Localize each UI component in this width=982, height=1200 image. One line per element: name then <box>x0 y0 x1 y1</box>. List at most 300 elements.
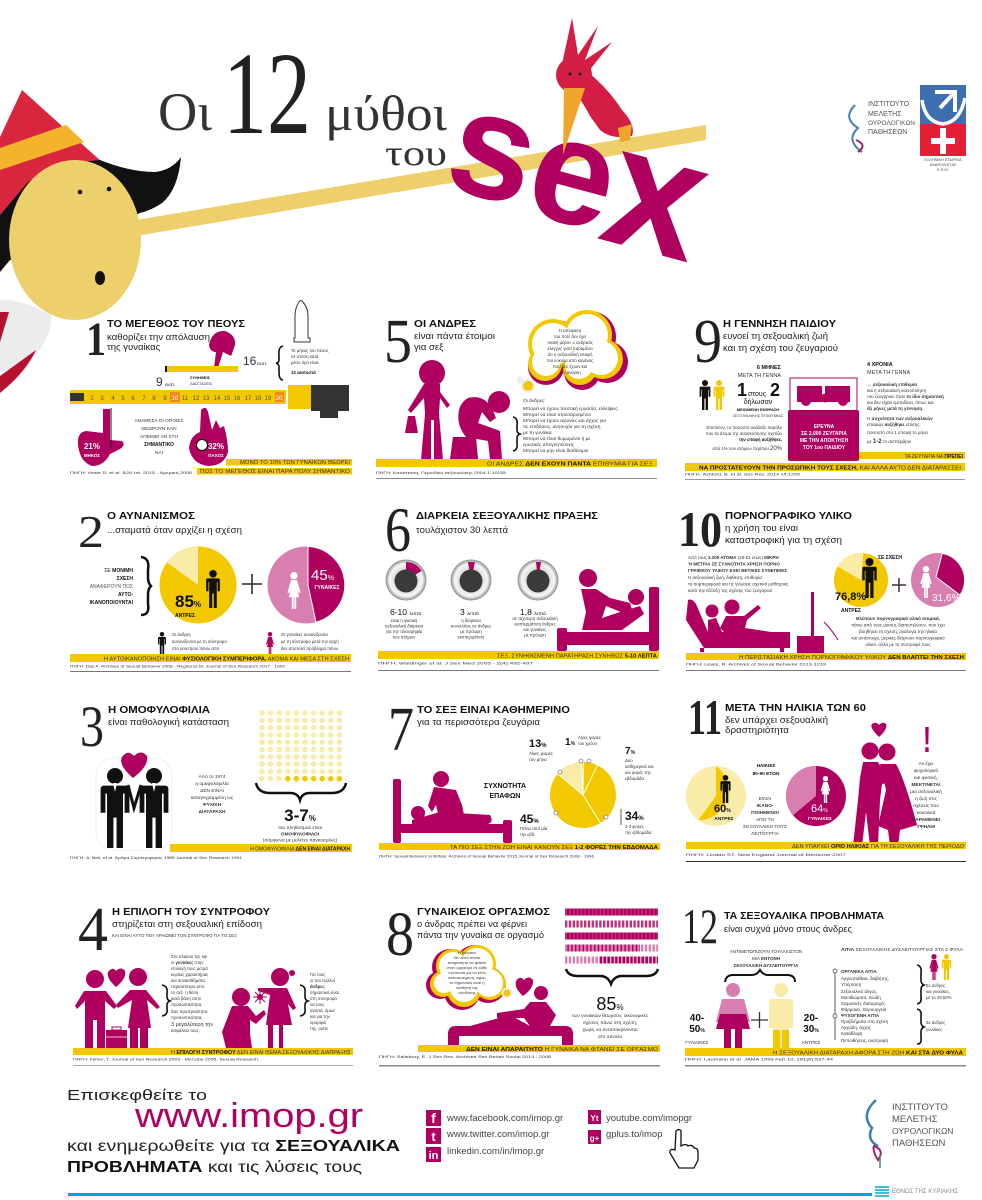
text: fact: ΨΥΧΙΚΗ <box>203 802 222 808</box>
causes list: Αγχώδη, άγχος <box>841 1024 872 1030</box>
left column: 6 months: 1 <box>737 380 747 400</box>
plus sign <box>242 574 262 594</box>
footer call to action: www.imop.gr <box>134 1097 363 1135</box>
text: stat caption: του πληθυσμού είναι <box>278 824 322 831</box>
conclusion bar <box>418 1045 660 1053</box>
number 6: 6 <box>385 494 411 565</box>
pie chart: women 64%: 64% <box>811 803 828 815</box>
label: 34%: 2-3 φορές <box>625 824 644 829</box>
footer call to action: ΠΡΟΒΛΗΜΑΤΑ και τις λύσεις τους <box>67 1159 362 1176</box>
source: ΠΗΓΗ: Salisbury, E. J Sex Res. Archives Sex Behav Social 2014 - 2008 <box>379 1055 551 1059</box>
text list: Μπορεί να έχουν πιεστική εργασία, ελλείψεις <box>523 405 618 412</box>
icon: kneeling man offering flower to woman <box>222 968 296 1048</box>
conclusion bar <box>376 459 657 468</box>
logo: institute of urological diseases: ΜΕΛΕΤΗΣ <box>868 111 902 118</box>
tape measure: 14 <box>214 396 221 402</box>
subheading: ο άνδρας πρέπει να φέρνει <box>417 919 527 930</box>
causes list: Φάρμακα, Χειρουργεία <box>841 1006 887 1012</box>
heading: Η ΓΕΝΝΗΣΗ ΠΑΙΔΙΟΥ <box>723 318 836 330</box>
stat: women: 40- <box>690 1013 704 1024</box>
text: left: οι γυναίκες στην <box>171 960 203 965</box>
title: Οι 12 μύθοι του: του <box>385 133 447 173</box>
left column: 6 months: από 1% των ατόμων περίπου 20% <box>712 446 783 452</box>
right column: 4 years: έξι μήνες μετά τη γέννηση. <box>867 406 923 412</box>
subheading: είναι συχνά μόνο στους άνδρες <box>724 924 852 935</box>
icon: couple on sofa <box>686 600 790 652</box>
source: ΠΗΓΗ: Κατάσταση, Περιοδικό σεξουαλικής 2004-1-10155 <box>376 471 506 475</box>
text: left: προσωπικότητα. <box>171 1002 202 1007</box>
causes list: Προβλήματα στη σχέση <box>841 1018 889 1024</box>
link text: www.twitter.com/imop.gr <box>446 1129 549 1140</box>
tape measure: 3 <box>100 396 104 402</box>
number 10: 10 <box>678 501 722 557</box>
left column: 6 months: 2 <box>770 380 780 400</box>
icon: ok hand 32%: ΠΑΧΟΣ <box>208 453 224 458</box>
text: left note: ΣΕ ΜΟΝΙΜΗ <box>104 568 133 574</box>
dot matrix chart <box>262 713 341 779</box>
conclusion bar: Η ΟΜΟΦΥΛΟΦΙΛΙΑ ΔΕΝ ΕΙΝΑΙ ΔΙΑΤΑΡΑΧΗ <box>250 846 350 852</box>
icon and note: women: Οι γυναίκες αυνανίζονται <box>281 632 328 637</box>
text: right: και για την <box>310 1014 330 1019</box>
label: 7%: 7% <box>625 746 635 757</box>
label: 7%: και φορές την <box>625 770 651 775</box>
icon: linkedin: in <box>429 1150 439 1162</box>
icon: family in bed: ΕΡΕΥΝΑ <box>814 424 835 430</box>
logo: male and female symbol: Ε.Ε.Μ. <box>937 168 949 172</box>
conclusion bars: ΜΟΝΟ ΤΟ 10% ΤΩΝ ΓΥΝΑΙΚΩΝ ΘΕΩΡΕΙ <box>240 460 350 466</box>
text: note lower: γυναίκες <box>926 1027 942 1032</box>
text: fact: η ομοφυλοφιλία <box>195 781 229 787</box>
panel: myth 4 <box>73 896 353 1066</box>
text: note: μια σεξουαλική <box>910 788 942 795</box>
label: 13%: 13% <box>529 738 547 750</box>
brace <box>917 965 924 1004</box>
causes list: ΟΡΓΑΝΙΚΑ ΑΙΤΙΑ <box>841 969 878 974</box>
tape measure: 13 <box>203 396 210 402</box>
icon: TV <box>797 592 838 653</box>
tape measure: 10 <box>172 396 179 402</box>
conclusion bar: ΣΕΞ, ΣΥΝΗΘΙΣΜΕΝΗ ΠΑΡΑΤΗΡΑΣΗ ΣΥΝΗΘΩΣ 5-10 ΛΕΠΤΑ <box>497 654 657 660</box>
text block: τη συμπεριφορά και τις γνώσεις σχετικά μαθήτριας <box>688 580 789 586</box>
pie chart: women 31.6%: ΓΥΝΑΙΚΕΣ <box>928 608 952 614</box>
thought bubble: αίσθηση της <box>456 985 478 990</box>
text list: με τη γυναίκα <box>523 430 552 436</box>
text: stat caption: σχέσεις πάνω στη σχέση, <box>583 1019 637 1026</box>
conclusion bar: Η ΑΥΤΟΙΚΑΝΟΠΟΙΗΣΗ ΕΙΝΑΙ ΦΥΣΙΟΛΟΓΙΚΗ ΣΥΜΠΕΡΙΦΟΡΑ, ΑΚΟΜΑ ΚΑΙ ΜΕΣΑ ΣΤΗ ΣΧΕΣΗ <box>104 656 349 662</box>
tape measure: 12 <box>193 396 200 402</box>
text: satisfied: ΕΙΝΑΙ <box>759 796 771 802</box>
label: men: ΑΝΤΡΕΣ <box>802 1040 821 1046</box>
subheading: καθορίζει την απόλαυση <box>107 332 210 343</box>
timer: 3 minutes: η διάρκεια <box>461 618 481 623</box>
thought bubble <box>426 945 512 1010</box>
right column: 4 years: και δεν είχαν εμποδίσει, όπως και <box>867 399 934 405</box>
stat: 3-7%: 3-7% <box>284 806 316 825</box>
label: 13%: τον μήνα <box>529 756 547 762</box>
text: right: στη σύντροφό <box>310 996 337 1001</box>
tape measure: 19 <box>265 396 272 402</box>
link text: youtube.com/imopgr <box>606 1113 692 1124</box>
text: age note: 80-90 ΕΤΩΝ <box>753 771 780 777</box>
heading: Η ΕΠΙΛΟΓΗ ΤΟΥ ΣΥΝΤΡΟΦΟΥ <box>112 906 270 918</box>
condom fact: σε στύση κατά <box>291 354 319 359</box>
text: satisfied: ΙΚΑΝΟ- <box>756 803 774 809</box>
text block: Από τους 3.205 ΑΤΟΜΑ (18-51 ετών) ΜΙΚΡΗ <box>688 555 779 560</box>
text list: Μπορεί να είναι στρεσαρισμένοι <box>523 411 591 418</box>
panel: myth 10: καταστροφική για τη σχέση <box>725 535 842 546</box>
conclusion bar <box>685 1048 966 1056</box>
right column: 4 years: του ζευγαριού ήταν το ίδιο σημαντική <box>867 394 944 399</box>
social media links <box>426 1110 698 1168</box>
conclusion bar: ΔΕΝ ΕΙΝΑΙ ΑΠΑΡΑΙΤΗΤΟ Η ΓΥΝΑΙΚΑ ΝΑ ΦΤΑΝΕΙ ΣΕ ΟΡΓΑΣΜΟ <box>466 1047 658 1053</box>
icon and note: women <box>266 632 339 654</box>
tape measure: 7 <box>142 396 146 402</box>
left column: 6 months: ΜΕΙΩΜΕΝΗ ΕΚΦΡΑΣΗ <box>737 407 779 412</box>
icon: family in bed: ΣΕ 2.000 ΖΕΥΓΑΡΙΑ <box>801 431 847 437</box>
icon: couple with heart <box>75 968 160 1048</box>
tape measure: 9 <box>163 396 167 402</box>
text: left: κυρίως χαρακτήρας <box>171 972 208 977</box>
panel: myth 6 <box>378 494 659 671</box>
text: left: και συναισθήματα <box>171 978 205 983</box>
label: in relationship: ΣΕ ΣΧΕΣΗ <box>878 555 902 561</box>
stat: men: 30% <box>803 1024 819 1035</box>
causes list: Κατάθλιψη <box>841 1030 863 1036</box>
text: satisfied: ΛΕΙΤΟΥΡΓΙΑ <box>751 831 780 837</box>
subheading: δεν υπάρχει σεξουαλική <box>725 715 828 726</box>
icon: google plus <box>588 1130 601 1144</box>
heading: ΤΑ ΣΕΞΟΥΑΛΙΚΑ ΠΡΟΒΛΗΜΑΤΑ <box>724 910 884 922</box>
link text: www.facebook.com/imop.gr <box>446 1113 563 1124</box>
right column: 4 years: 4 ΧΡΟΝΙΑ <box>867 362 893 368</box>
text: left note: ΣΧΕΣΗ <box>117 576 133 582</box>
text: right: οι πιο πολλοί <box>310 978 335 983</box>
thought bubble: ικανοποιημένη, αφού <box>448 975 486 980</box>
thought bubble: σύνδεσης <box>458 990 476 995</box>
source: ΠΗΓΗ: Lindau ST, New England Journal of Medicine 2007 <box>686 853 846 857</box>
text: fact: ΔΙΑΤΑΡΑΧΗ <box>199 809 226 815</box>
subheading: για τα περισσότερα ζευγάρια <box>417 717 541 728</box>
logo: institute footer: ΠΑΘΗΣΕΩΝ <box>892 1138 946 1149</box>
subheading: τουλάχιστον 30 λεπτά <box>416 525 509 536</box>
pie chart: men 76.8%: 76,8% <box>835 591 866 603</box>
text: note: ΜΕΚΤΙΝΕΤΑΙ <box>912 782 941 788</box>
causes list: Ορμονικές διαταραχές <box>841 1000 886 1006</box>
text: note upper: με το 40-50% <box>926 995 952 1000</box>
conclusion bar <box>170 844 352 852</box>
icon: youtube: Yt <box>590 1114 599 1123</box>
source: ΠΗΓΗ: Das A. Archives of Sexual Behavior 2008 - Regnerus M. Journal of Sex Research 2017 - 1900 <box>70 664 285 668</box>
left column: 6 months <box>700 365 784 452</box>
text: note: η ζωή στις <box>915 795 938 802</box>
pie chart: women 64% <box>786 766 846 826</box>
conclusion bar <box>73 1048 353 1056</box>
left column: 6 months: Επιπλέον, το ποσοστό ανέδειξε παρόλο <box>706 425 783 430</box>
label: 34% <box>621 809 652 835</box>
label: 45%: την εβδ. <box>520 832 535 837</box>
right column: 4 years: επαφών αυξήθηκε επίσης, <box>867 422 921 427</box>
plus sign <box>751 1012 768 1028</box>
left column: 6 months: ΣΕΞΟΥΑΛΙΚΗΣ ΕΠΙΘΥΜΙΑΣ <box>733 413 784 418</box>
conclusion bar: ΟΙ ΑΝΔΡΕΣ ΔΕΝ ΕΧΟΥΝ ΠΑΝΤΑ ΕΠΙΘΥΜΙΑ ΓΙΑ ΣΕΞ <box>487 462 654 468</box>
timer: 6-10 minutes: 6-10 λεπτά <box>390 607 421 617</box>
conclusion bar <box>378 651 659 660</box>
causes list: Σεξουαλικό άλγος, <box>841 988 877 994</box>
label: 1% caption: Λίγες φορές <box>578 735 601 740</box>
icon: two men holding hands with heart <box>96 752 172 850</box>
timer: 1.8 minutes: και γυναίκες <box>524 627 546 632</box>
right column: 4 years: ΜΕΤΑ ΤΗ ΓΕΝΝΑ <box>867 370 910 376</box>
causes list <box>833 947 964 1043</box>
number 8: 8 <box>386 901 414 969</box>
icon: couple on bed <box>557 569 659 651</box>
heading: ΓΥΝΑΙΚΕΙΟΣ ΟΡΓΑΣΜΟΣ <box>417 906 550 918</box>
panel: myth 5 <box>376 308 657 479</box>
text: right: να τους <box>310 1002 324 1007</box>
number 9: 9 <box>694 308 722 376</box>
thought bubble: πιο εύκολα από κανένας <box>547 358 593 363</box>
text: right: άνδρες <box>310 984 325 989</box>
brace <box>725 970 795 982</box>
icon: facebook: f <box>431 1110 436 1126</box>
panel: myth 9 <box>685 308 965 480</box>
timer: 3 minutes: εκσπερμάτιση <box>458 634 485 640</box>
label: 7%: καθημερινά και <box>625 764 654 769</box>
tape measure: 18 <box>255 396 262 402</box>
text: note upper: και γυναίκες, <box>926 989 950 994</box>
text block: Η σεξουαλική ζωή, διάθεση, επιθυμία <box>688 574 762 580</box>
timer: 1.8 minutes: σε ταχύτερη σεξουαλική <box>512 616 558 621</box>
text: left: ασφάλεια τους. <box>171 1028 200 1033</box>
logo: institute of urological diseases: ΟΥΡΟΛΟΓΙΚΩΝ <box>868 120 915 127</box>
text: right: αγαπά, όμως <box>310 1008 335 1013</box>
text block: Ή ΜΕΤΡΙΑ ΣΕ ΣΥΧΝΟΤΗΤΑ ΧΡΗΣΗ ΠΟΡΝΟ <box>688 562 780 566</box>
icon: hand cursor <box>670 1130 698 1168</box>
text: sufferers: ΜΙΑ ΕΝΤΟΝΗ <box>752 956 780 961</box>
icon: dejected seated man <box>450 391 510 459</box>
text list: ερωτικές απογοητεύσεις <box>523 441 575 448</box>
text block: right: υλικό, αλλά με τη σύντροφό τους <box>865 641 931 647</box>
stat: women: 50% <box>689 1024 705 1035</box>
icon and note: men: στο γενετήσιο πάνω από <box>172 646 220 651</box>
heading: ΤΟ ΜΕΓΕΘΟΣ ΤΟΥ ΠΕΟΥΣ <box>107 318 245 330</box>
icon: pointing hand <box>209 331 235 368</box>
label: frequency: ΕΠΑΦΩΝ <box>489 793 521 800</box>
left column: 6 months: που τα άτομα της ανασκόπησης σχετίζει <box>706 431 782 436</box>
label: 45%: 45% <box>520 812 539 826</box>
tape measure: 4 <box>111 396 115 402</box>
text: fact: Από το 1974 <box>198 773 226 780</box>
text block: right: βοηθήσει τη σχέση, ανάλογα την ηλικία <box>859 628 937 634</box>
conclusion bar: ΔΕΝ ΥΠΑΡΧΕΙ ΟΡΙΟ ΗΛΙΚΙΑΣ ΓΙΑ ΤΗ ΣΕΞΟΥΑΛΙΚΗ ΤΗΣ ΠΕΡΙΟΔΟ <box>792 844 964 850</box>
text list: Οι άνδρες: <box>523 397 545 404</box>
text: left note: ΑΥΤΟ- <box>118 592 133 598</box>
conclusion bars: ΤΑ ΖΕΥΓΑΡΙΑ ΝΑ ΠΡΕΠΕΙ <box>905 454 964 460</box>
timer: 3 minutes: 3 λεπτά <box>460 607 479 617</box>
thought bubble: ότι η σεξουαλική επαφή <box>548 352 593 357</box>
thought bubble: «κακή μέρα» ο ανδρικός <box>547 340 593 345</box>
text: fact: καταγεγραμμένη ως <box>191 794 234 801</box>
source: ΠΗΓΗ: Veale D. et al. BJU Int. 2015 - Αμερική 2006 <box>70 471 192 475</box>
brace <box>141 557 151 615</box>
icon and note: men: αυνανίζονται με τη σύντροφο <box>172 639 227 644</box>
pie chart: women 64%: ΓΥΝΑΙΚΕΣ <box>808 816 832 822</box>
footer call to action: και ενημερωθείτε για τα ΣΕΞΟΥΑΛΙΚΑ <box>67 1138 401 1155</box>
right column: 4 years: με 1-2 το σεπτέμβριο <box>867 439 911 445</box>
text block: right: και αντίστοιχα, μερικές δείχνουν πορνογραφικό <box>851 634 945 640</box>
text: note upper: Σε άνδρες <box>926 983 945 988</box>
panel: myth 10 <box>678 501 966 671</box>
source: ΠΗΓΗ: Laumann et al. JAMA 1999 Feb 10; 281(6):537-44 <box>685 1058 833 1062</box>
logo: institute of urological diseases: ΙΝΣΤΙΤΟΥΤΟ <box>868 101 910 108</box>
pie chart: men 76.8% <box>834 553 888 614</box>
left column: 6 months: δήλωσαν <box>744 399 773 406</box>
conclusion bars <box>685 452 965 472</box>
tape measure: 8 <box>152 396 156 402</box>
heading: ΤΟ ΣΕΞ ΕΙΝΑΙ ΚΑΘΗΜΕΡΙΝΟ <box>417 704 570 716</box>
text: left: Σαν προτεραιότητα <box>171 1009 208 1014</box>
label: 1% caption: τον χρόνο <box>578 741 598 746</box>
conclusion bars <box>197 459 352 475</box>
thought bubble: συνουσία για να είναι <box>448 970 486 975</box>
brace <box>566 969 658 984</box>
number 12: 12 <box>682 898 718 954</box>
pie chart: men 76.8%: ΑΝΤΡΕΣ <box>841 608 861 614</box>
panel: myth 7 <box>379 696 660 858</box>
title: Οι 12 μύθοι του: μύθοι <box>325 85 448 141</box>
title word: sex: x <box>586 88 729 299</box>
panel: myth 8 <box>379 901 660 1066</box>
timer: 3 minutes: συνουσίας σε άνδρες <box>451 624 491 628</box>
text: sufferers: ΣΕΞΟΥΑΛΙΚΗ ΔΥΣΛΕΙΤΟΥΡΓΙΑ <box>734 963 799 968</box>
icon: woman 40-50% <box>716 983 750 1048</box>
title word: sex <box>433 55 729 299</box>
conclusion bar: Η ΣΕΞΟΥΑΛΙΚΗ ΔΙΑΤΑΡΑΧΗ ΑΦΟΡΑ ΣΤΗ ΖΩΗ ΚΑΙ ΣΤΑ ΔΥΟ ΦΥΛΑ <box>773 1050 963 1056</box>
text: width matters: ΑΠΕΙΘΕΙ ΑΝ ΣΤΗ <box>140 434 178 440</box>
icon: ok hand 32%: 32% <box>208 442 224 451</box>
text: note: ΠΑΡΑΜΕΝΕΙ <box>912 817 941 823</box>
pie chart: men 60% <box>686 766 746 826</box>
panel: myth 11: δραστηριότητα <box>725 725 790 736</box>
text: width matters: ΘΕΩΡΟΥΝ ΚΑΝ <box>141 426 177 432</box>
exclamation mark: ! <box>923 719 931 760</box>
conclusion bars: ΠΩΣ ΤΟ ΜΕΓΕΘΟΣ ΕΙΝΑΙ ΠΑΡΑ ΠΟΛΥ ΣΗΜΑΝΤΙΚΟ <box>200 469 350 475</box>
thought bubble: του ποτέ δεν έχει <box>554 334 586 339</box>
right column: 4 years: → σεξουαλική επιθυμία <box>867 382 917 388</box>
timer: 1.8 minutes <box>512 560 558 638</box>
causes list: Αγγειοπάθεια, διαβήτης, <box>841 975 889 981</box>
icon: elderly couple with heart <box>853 723 917 846</box>
icon: family in bed: ΜΕ ΤΗΝ ΑΠΟΚΤΗΣΗ <box>800 438 849 444</box>
text: left note: ΙΚΑΝΟΠΟΙΟΥΝΤΑΙ <box>90 600 134 606</box>
pie chart: men 85% <box>160 546 236 624</box>
pie chart: women 45%: ΓΥΝΑΙΚΕΣ <box>315 585 339 591</box>
text: width matters: ΝΑΙ <box>155 450 163 456</box>
logo: institute footer: ΜΕΛΕΤΗΣ <box>892 1114 938 1125</box>
text: width matters: ΣΗΜΑΝΤΙΚΟ <box>144 442 174 448</box>
causes list: Μυοϊδώματα, Ινώδη <box>841 994 881 1000</box>
panel: myth 5: για σεξ <box>414 342 444 353</box>
pie chart: men 85%: 85% <box>175 592 201 611</box>
text list: Μπορεί να μην είναι διαθέσιμοι <box>523 447 588 454</box>
ruler scale: εκατ. <box>165 383 175 388</box>
link text: gplus.to/imop <box>606 1129 663 1140</box>
text: age note: ΗΛΙΚΙΕΣ <box>757 763 776 769</box>
conclusion bar <box>70 654 351 662</box>
icon and note: men: Οι άνδρες <box>172 632 191 637</box>
panel: myth 9: και τη σχέση του ζευγαριού <box>723 343 838 354</box>
ruler scale: 9 <box>156 375 163 389</box>
text: note: ΥΨΗΛΗ! <box>917 824 936 830</box>
icon: man 20-30% <box>769 983 793 1048</box>
text: stat caption: στο σύνολο <box>598 1033 623 1040</box>
panel: myth 2 <box>70 506 351 672</box>
text: right: σημαντικό είναι <box>310 990 339 995</box>
timer: 1.8 minutes: εκσπερμάτιση άνδρες <box>514 622 556 626</box>
timer: 6-10 minutes <box>385 560 426 640</box>
condom fact: μέσο όρο είναι <box>291 360 319 365</box>
text: right: Για τους <box>310 972 325 977</box>
source: ΠΗΓΗ: A. Bell, et al. Άρθρα Συμπεριφοράς 1985 Journal of Sex Research 1991 <box>70 856 242 860</box>
icon: condom <box>294 300 310 342</box>
heading: ΔΙΑΡΚΕΙΑ ΣΕΞΟΥΑΛΙΚΗΣ ΠΡΑΞΗΣ <box>416 510 598 522</box>
pie chart: women 31.6%: 31,6% <box>932 593 960 604</box>
text: stat caption: ΟΜΟΦΥΛΟΦΙΛΟΙ <box>281 832 320 838</box>
icon: woman and man small <box>929 954 951 980</box>
right column: 4 years: Η συχνότητα των σεξουαλικών <box>867 416 933 421</box>
number 3: 3 <box>80 694 104 759</box>
heading: Ο ΑΥΝΑΝΙΣΜΟΣ <box>107 510 195 522</box>
timer: 1.8 minutes: με πρόωρη <box>524 632 546 638</box>
conclusion bars: ΝΑ ΠΡΟΣΤΑΤΕΥΟΥΝ ΤΗΝ ΠΡΟΣΩΠΙΚΗ ΤΟΥΣ ΣΧΕΣΗ, ΚΑΙ ΑΛΛΑ ΑΥΤΟ ΔΕΝ ΔΙΑΤΑΡΑΣΣΕΙ <box>699 466 961 472</box>
right column: 4 years: ποσοστό στο 1 επαφή το μήνα <box>867 429 928 435</box>
conclusion bar: Η ΕΠΙΛΟΓΗ ΣΥΝΤΡΟΦΟΥ ΔΕΝ ΕΙΝΑΙ ΘΕΜΑ ΣΕΞΟΥΑΛΙΚΗΣ ΔΙΑΠΡΑΞΗΣ <box>171 1050 351 1056</box>
tape measure: 17 <box>245 396 252 402</box>
icon: hand showing length 21% <box>78 408 124 466</box>
bottom blue rule and publisher mark: ΕΘΝΟΣ ΤΗΣ ΚΥΡΙΑΚΗΣ <box>892 1189 958 1195</box>
panel: myth 3 <box>70 694 352 860</box>
label: 34%: 34% <box>625 809 644 823</box>
text: sufferers: ΑΝΤΙΜΕΤΩΠΙΖΟΥΝ ΤΟΥΛΑΧΙΣΤΟΝ <box>730 949 802 954</box>
left column: 6 months: την επαφή αυξήθηκε, <box>739 437 782 442</box>
text: left: περισσότερο από <box>171 984 205 989</box>
tape measure: 15 <box>224 396 231 402</box>
timer: 6-10 minutes: είναι η φυσική <box>391 618 418 623</box>
source: ΠΗΓΗ: Lewis, R. Archives of Sexual Behavior 2013-1219 <box>686 662 826 666</box>
number 11: 11 <box>688 689 722 745</box>
thought bubble: που δεν έχουν και <box>553 364 587 369</box>
panel: myth 1: της γυναίκας <box>107 342 161 353</box>
icon: youtube <box>588 1110 601 1124</box>
title: Οι 12 μύθοι του: Οι <box>158 82 212 142</box>
logo: institute footer <box>867 1100 953 1168</box>
label: women: ΓΥΝΑΙΚΕΣ <box>685 1040 709 1046</box>
subheading: στηρίζεται στη σεξουαλική επίδοση <box>112 919 262 930</box>
text: stat caption: (σύμφωνα με μελέτες παγκοσμίως) <box>263 836 338 844</box>
text: note: κανονικά <box>917 809 936 816</box>
plus sign <box>892 578 906 592</box>
causes list: Υπέρταση <box>841 981 862 987</box>
source: ΠΗΓΗ: Waldinger et al. J Sex Med 2005 - 2(4):492-497 <box>378 662 533 666</box>
heading: ΜΕΤΑ ΤΗΝ ΗΛΙΚΙΑ ΤΩΝ 60 <box>725 702 866 714</box>
icon: couple on bed with heart <box>448 978 573 1046</box>
icon: family in bed <box>788 378 859 461</box>
text: note: και φυσική, <box>914 774 938 781</box>
brace <box>300 985 308 1016</box>
causes list: ΑΙΤΙΑ ΣΕΞΟΥΑΛΙΚΗΣ ΔΥΣΛΕΙΤΟΥΡΓΙΑΣ ΣΤΑ 2 ΦΥΛΑ <box>841 947 964 953</box>
brace <box>162 985 170 1016</box>
timer: 6-10 minutes: για την πλειοψηφία <box>386 629 423 634</box>
